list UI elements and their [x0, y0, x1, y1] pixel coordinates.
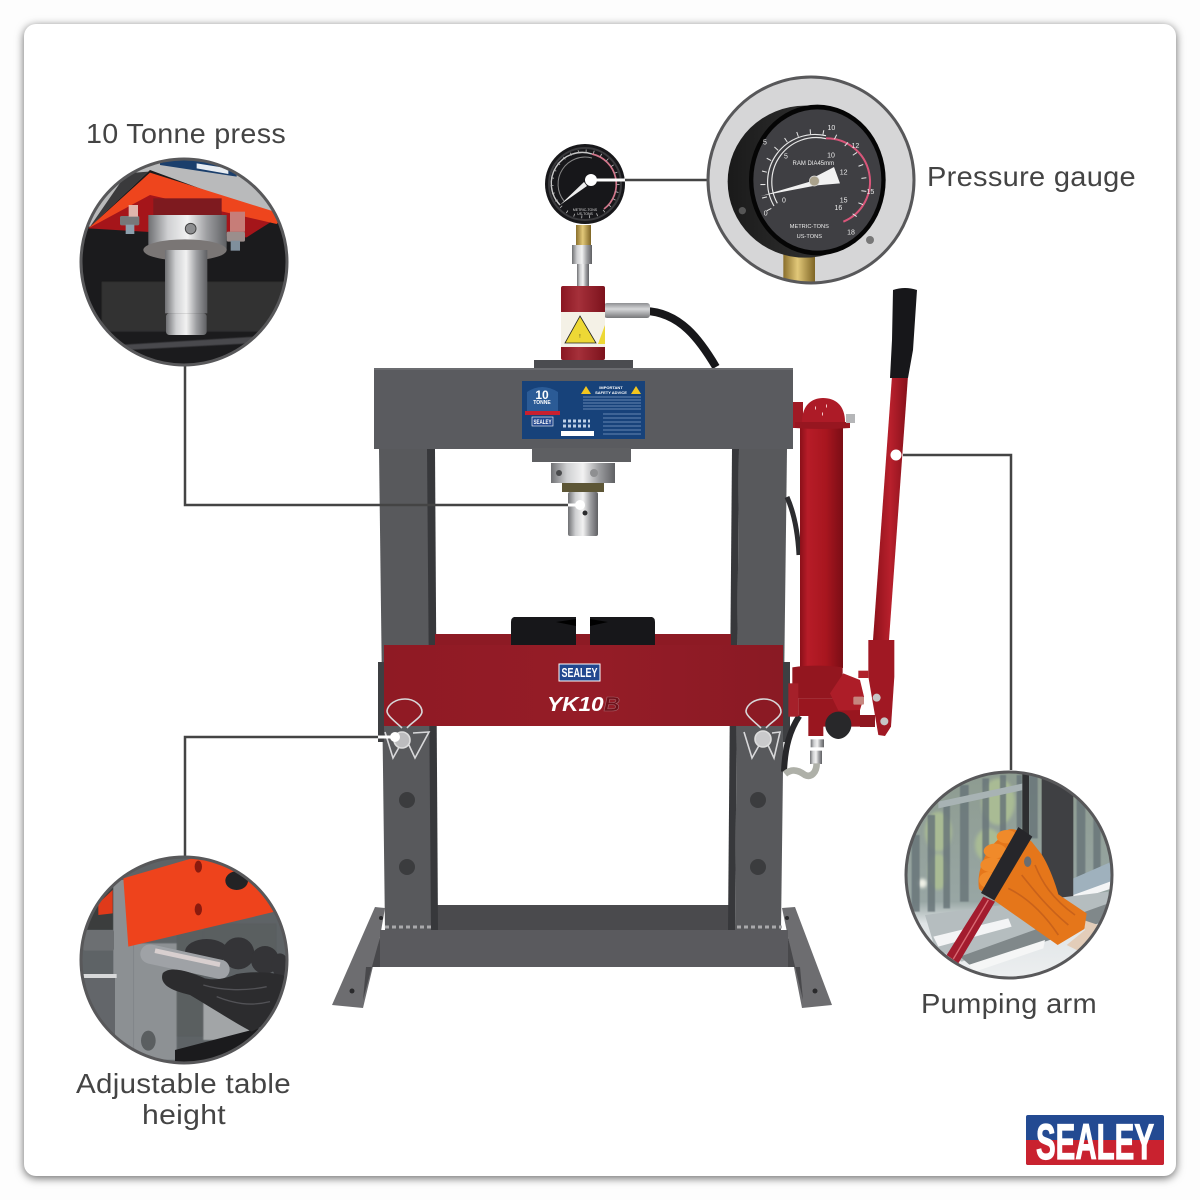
detail circle: adjustable table height: [80, 856, 288, 1064]
brass fitting: [783, 254, 815, 282]
light strip: [120, 337, 257, 350]
glove: [978, 829, 1087, 945]
window frame right: [1073, 882, 1110, 901]
table hole bottom: [195, 903, 202, 915]
table model name: YK10 B: [547, 694, 620, 716]
callout line: 10 tonne press: [185, 365, 568, 505]
small pressure gauge: METRIC-TONS: [573, 208, 598, 212]
safety label: 10: [535, 388, 549, 402]
lower panel: [102, 282, 288, 332]
lower hose: [784, 716, 799, 772]
upper background: [88, 163, 272, 227]
glove fingers: [185, 937, 288, 977]
pump handle rod: [873, 376, 908, 640]
safety label: SAFETY ADVICE: [595, 390, 627, 395]
gauge stem: [572, 225, 592, 286]
left leg: [379, 449, 438, 930]
callout line: pumping arm: [903, 455, 1011, 770]
fence rail: [938, 783, 1023, 808]
v-block right: [590, 617, 655, 646]
flange: [143, 239, 227, 261]
valve block: [830, 673, 864, 711]
table rear lip: [435, 634, 731, 646]
weld marks: [385, 926, 782, 928]
plate edge: [88, 173, 285, 228]
handle collar: [858, 671, 868, 678]
dial numbers: 5: [784, 153, 788, 160]
bottom dark box: [175, 1028, 260, 1062]
table side brackets: [378, 662, 790, 742]
retaining clip left: [385, 699, 429, 758]
top beam: [374, 368, 793, 449]
lower fitting: [785, 739, 824, 776]
callout marker: gauge: [585, 174, 625, 186]
dial unit metric: METRIC-TONS: [790, 224, 829, 230]
red table plate: [123, 855, 275, 947]
dial numbers: 5: [763, 140, 767, 147]
dial numbers: 0: [764, 210, 768, 217]
safety label: SEALEY: [534, 419, 552, 426]
hydraulic ram cylinder: [561, 286, 605, 360]
left rod: [83, 930, 114, 951]
base front plate: [380, 930, 788, 967]
table badge: [559, 664, 600, 681]
tick ring: [763, 132, 864, 223]
lug: [739, 207, 746, 214]
retaining clip right: [744, 699, 781, 758]
foliage: [918, 778, 1015, 890]
pump bracket top: [793, 402, 803, 428]
small pressure gauge: [545, 144, 625, 224]
pivot bolts: [873, 694, 881, 702]
valve body: [798, 698, 860, 736]
glove folds: [1008, 865, 1075, 935]
callout marker: table pin: [378, 732, 400, 742]
plate underside: [88, 195, 270, 238]
safety label: TONNE: [533, 400, 551, 406]
black bezel: [749, 105, 886, 255]
pump lower assembly: [784, 640, 894, 776]
left bolt: [120, 205, 139, 234]
grip: [981, 827, 1032, 900]
ram under plate: [532, 448, 631, 462]
rod highlight: [953, 900, 988, 959]
pump cylinder: [795, 398, 855, 668]
v-block left: [511, 617, 576, 646]
press machine: [332, 144, 917, 1008]
grub screw: [185, 223, 196, 234]
steel pin: [150, 954, 220, 969]
soft background bars: [87, 888, 260, 1060]
right window pane: [1073, 862, 1112, 895]
ram top plate: [534, 360, 633, 369]
dial numbers: 0: [782, 198, 786, 205]
collar upper: [153, 198, 222, 215]
release knob: [825, 712, 851, 739]
small pressure gauge: US-TONS: [577, 212, 594, 216]
label: adjustable table height: [76, 1068, 291, 1130]
table red front: [384, 645, 783, 726]
left lower plate: [113, 978, 115, 1034]
dial numbers: [763, 125, 874, 236]
table badge: SEALEY: [562, 665, 598, 680]
detail circle: pressure gauge: [700, 70, 920, 290]
gap in the grip: [1024, 856, 1031, 867]
upper left dark corner: [90, 172, 148, 227]
scale red: [826, 138, 870, 222]
label: 10 tonne press: 10 Tonne press: [86, 118, 286, 149]
pin highlight: [155, 951, 220, 965]
label: pumping arm: Pumping arm: [921, 988, 1097, 1019]
safety label: [522, 381, 645, 439]
label: pressure gauge: Pressure gauge: [927, 161, 1136, 192]
piston end: [166, 313, 207, 335]
right leg: [728, 449, 787, 930]
fence slats: [912, 775, 1101, 912]
glove fingers: [979, 830, 1017, 888]
gauge body: [728, 106, 828, 258]
dial unit us: US-TONS: [797, 234, 822, 240]
foot right: [782, 907, 832, 1008]
glove wrinkles: [203, 985, 270, 1004]
blue label piece: [160, 160, 237, 177]
label: adjustable table height: Adjustable table: [76, 1068, 291, 1099]
dial numbers: 16: [834, 205, 842, 212]
lower post hole: [141, 1031, 156, 1051]
ram brass ring: [562, 483, 604, 492]
needle: [761, 167, 840, 196]
callout marker: piston: [568, 500, 585, 510]
cylinder collar: [792, 666, 843, 698]
valve bolt: [853, 697, 864, 705]
callout marker: handle: [890, 450, 902, 460]
detail circle: pumping arm: [895, 765, 1122, 985]
window slab bands: [925, 892, 1108, 962]
dial numbers: 15: [866, 189, 874, 196]
scale white inner: [772, 138, 826, 203]
rear crossmember: [435, 905, 731, 931]
collar: [148, 215, 227, 250]
label: adjustable table height: height: [142, 1099, 226, 1130]
scale white outer: [768, 134, 826, 206]
pivot bar: [860, 715, 875, 727]
callout line: adjustable table height: [185, 737, 378, 856]
detail circle: 10 tonne press: [80, 158, 288, 366]
white label piece: [197, 163, 228, 174]
black knob: [225, 871, 248, 890]
left strip: [83, 974, 117, 978]
back lug right: [866, 236, 874, 244]
piston: [165, 250, 207, 313]
dial numbers: 10: [827, 153, 835, 160]
right bolt: [227, 212, 245, 251]
safety label: IMPORTANT: [599, 385, 623, 390]
needle hub: [809, 176, 819, 186]
left small red: [98, 890, 113, 915]
hydraulic ram cylinder: !: [579, 334, 581, 340]
dial numbers: 12: [840, 170, 848, 177]
pump handle grip: [890, 288, 917, 378]
glove palm: [162, 969, 287, 1032]
handle pivot block: [868, 640, 894, 736]
foot left: [332, 907, 385, 1008]
rod: [947, 897, 995, 963]
dial numbers: 12: [851, 143, 859, 150]
dark column: [1042, 775, 1073, 898]
dial numbers: 10: [827, 125, 835, 132]
callout line: pressure gauge: [625, 179, 708, 181]
ram collar: [551, 463, 615, 483]
mount bracket: [788, 683, 798, 717]
dial numbers: 18: [847, 229, 855, 236]
dial numbers: 15: [840, 198, 848, 205]
skin: [1067, 920, 1098, 955]
ram piston: [568, 492, 598, 536]
hose fitting: [604, 303, 650, 318]
dial brand text: RAM DIA45mm: [793, 161, 834, 167]
hose upper on right side: [787, 497, 799, 555]
left post: [113, 880, 133, 1057]
table hole top: [195, 861, 202, 873]
hose from ram: [645, 311, 716, 367]
face: [753, 109, 881, 251]
